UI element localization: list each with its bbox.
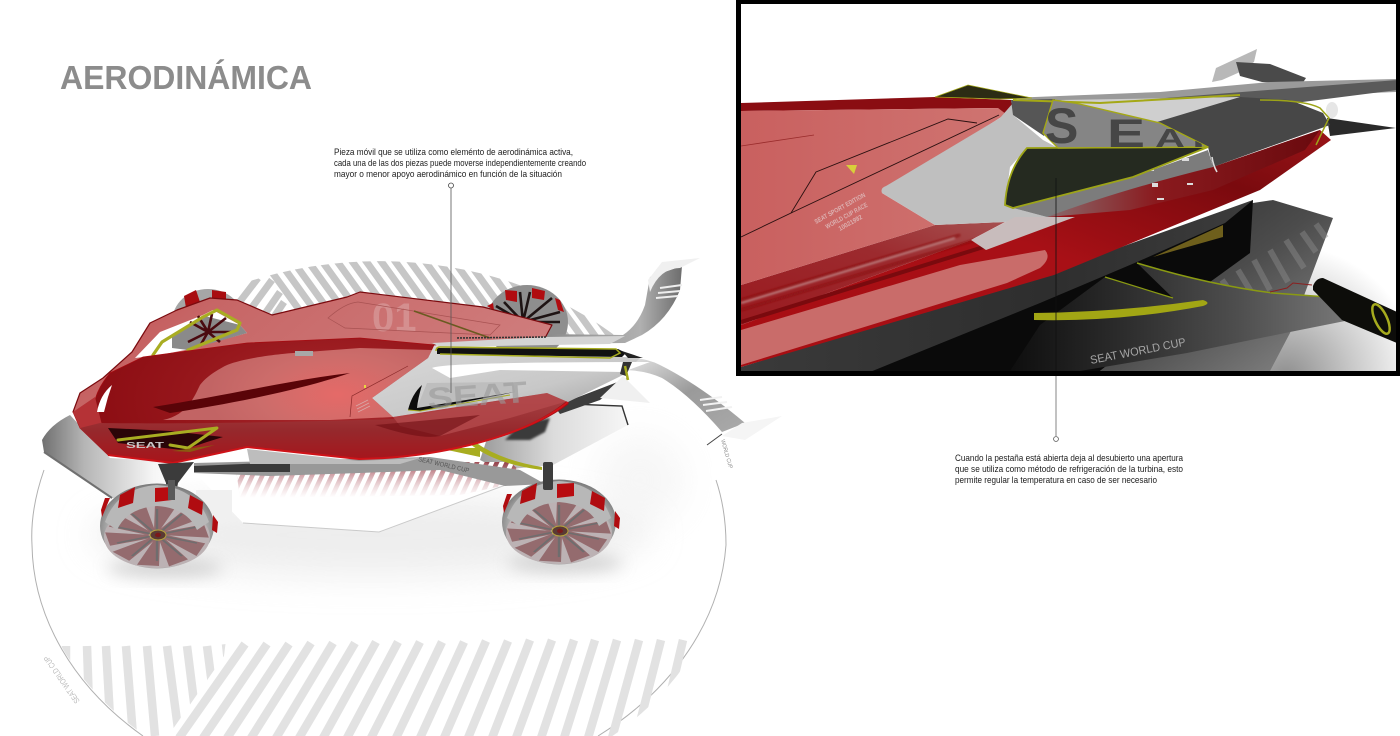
detail: streak band <box>741 222 1005 325</box>
detail: plate text: SEAT WORLD CUP <box>1089 337 1187 367</box>
detail: light strip <box>1060 97 1240 122</box>
front intake with badge: SEAT <box>126 441 164 450</box>
white highlight strip <box>432 362 650 378</box>
text block: cooling opening <box>955 452 1184 485</box>
detail: hood panel lines <box>741 115 999 237</box>
front wheel right <box>502 462 620 564</box>
detail: SEAT flap <box>1042 99 1209 149</box>
detail: top small wing <box>1212 49 1306 84</box>
detail: olive top edge <box>1013 95 1240 103</box>
detail: silver carbon panel <box>882 103 1058 225</box>
circular seal text: SEAT WORLD CUP <box>42 654 82 705</box>
panel: detail view frame <box>736 0 1400 376</box>
detail: olive roof peak <box>935 85 1032 99</box>
fin small text: WORLD CUP <box>719 439 733 470</box>
text block: cooling opening: que se utiliza como método de refrigeración de la turbina, esto <box>955 463 1183 474</box>
detail: rear back floor <box>1100 200 1333 371</box>
detail: black underside <box>872 200 1253 371</box>
upper fin <box>543 258 700 344</box>
detail: light carbon wedge <box>971 217 1075 250</box>
circular backdrop outline <box>32 470 726 736</box>
detail: dark upper edge <box>741 97 1012 113</box>
detail: SEAT flap: E <box>1107 112 1145 156</box>
text block: active aerodynamic piece: mayor o menor apoyo aerodinámico en función de la situación <box>334 168 562 179</box>
text block: cooling opening: permite regular la temperatura en caso de ser necesario <box>955 474 1157 485</box>
front wheel left <box>100 462 218 568</box>
hood tip window gap <box>97 385 112 412</box>
side olive trim <box>436 347 620 358</box>
text block: active aerodynamic piece: Pieza móvil que se utiliza como eleménto de aerodinámica activa, <box>334 146 573 157</box>
detail: deep red hull <box>741 130 1331 367</box>
hood small marks <box>295 351 370 412</box>
canopy line details <box>328 302 500 335</box>
bottom stripe pattern <box>66 640 683 736</box>
detail: rear white nib <box>1326 102 1338 118</box>
leader line: active aero piece <box>448 183 454 393</box>
detail: strip under opening <box>1013 150 1213 217</box>
hood nose tint <box>73 397 108 455</box>
rear left wheel <box>172 289 244 355</box>
gray strip under lower lip <box>247 449 420 464</box>
rear fairing tip <box>620 351 643 380</box>
lower bright red edge <box>108 402 568 463</box>
text block: cooling opening: Cuando la pestaña está abierta deja al desubierto una apertura <box>955 452 1184 463</box>
floor: white underbody <box>180 385 628 532</box>
hood vent outline <box>350 366 408 417</box>
red reflection stripes under body <box>235 462 530 498</box>
detail: black cooling opening <box>1005 147 1208 208</box>
number 01 watermark: 01 <box>372 296 416 340</box>
main hood <box>73 338 568 463</box>
detail: lens inlay on hull <box>1047 130 1320 217</box>
detail: lens highlight <box>1212 157 1217 172</box>
hood highlight <box>163 348 432 420</box>
top stripe pattern <box>237 261 614 335</box>
trim dark line <box>457 337 547 338</box>
detail: SEAT flap: S <box>1045 98 1078 154</box>
side black slot <box>437 348 626 357</box>
detail: carbon top strip <box>1157 97 1330 167</box>
detail: floor stripes <box>1222 224 1326 298</box>
lower side shading <box>80 393 568 463</box>
detail: carbon underside band <box>741 200 1253 372</box>
detail: pink lower surface <box>741 250 1048 365</box>
top red panel <box>73 292 552 412</box>
detail: edition text: WORLD CUP RACE <box>825 202 869 231</box>
detail: olive rear trim <box>1260 100 1329 145</box>
detail: SEAT flap: T <box>1185 129 1212 152</box>
cockpit window with rear wheel <box>135 310 247 358</box>
detail: rear dark tail <box>1327 118 1396 136</box>
detail: edition text <box>814 192 869 233</box>
detail: lens specks <box>1147 158 1193 200</box>
lower rear reflections <box>375 393 568 437</box>
trim texture band <box>432 336 625 347</box>
detail: dark carbon corner behind flap <box>1011 99 1055 136</box>
detail: edition text: SEAT SPORT EDITION <box>814 192 867 226</box>
small floor text: SEAT WORLD CUP <box>418 456 470 475</box>
olive struts <box>438 442 542 470</box>
text block: active aerodynamic piece <box>334 146 586 179</box>
active aero flap: SEAT <box>426 376 528 416</box>
detail: yellow triangle mark <box>846 165 857 174</box>
detail: edition text: 10021992 <box>838 214 864 233</box>
ground shadow <box>90 435 685 578</box>
front intake with badge <box>108 428 223 452</box>
lower fin <box>600 358 782 445</box>
detail: wing plate <box>1010 263 1360 371</box>
detail: long rear band <box>1016 79 1396 100</box>
dark underbody band <box>194 378 628 486</box>
hood crease <box>153 373 350 413</box>
leader line: cooling opening <box>1054 178 1058 441</box>
silver side panel <box>372 346 640 417</box>
text block: active aerodynamic piece: cada una de las dos piezas puede moverse independientemente creando <box>334 157 586 168</box>
detail: SEAT flap: A <box>1155 123 1185 153</box>
car: main view <box>42 258 782 578</box>
rear right wheel <box>486 285 568 359</box>
active aero flap <box>408 376 528 416</box>
detail: suspension arm <box>1153 225 1223 257</box>
left floor wedge <box>42 415 182 502</box>
canopy olive stripe <box>414 311 490 338</box>
detail: axle cylinder <box>1270 278 1397 343</box>
detail: pink hood surface <box>741 108 1006 285</box>
title: AERODINÁMICA <box>60 59 312 97</box>
